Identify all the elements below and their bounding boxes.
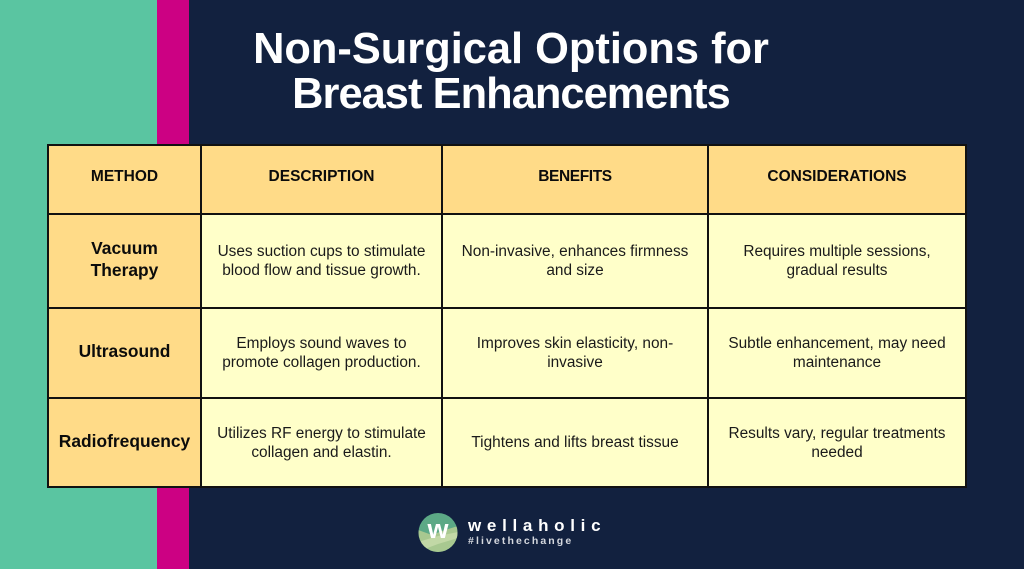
title: Non-Surgical Options for	[253, 25, 769, 73]
vacuum therapy benefits: Non-invasive, enhances firmness	[462, 243, 688, 260]
title	[253, 25, 769, 118]
ultrasound description: Employs sound waves to	[236, 335, 407, 352]
row label: vacuum therapy	[49, 215, 200, 307]
ultrasound considerations: Subtle enhancement, may need	[728, 335, 946, 352]
vacuum therapy considerations: gradual results	[787, 262, 887, 279]
radiofrequency benefits	[443, 399, 707, 486]
ultrasound description	[202, 309, 441, 397]
vacuum therapy benefits	[443, 215, 707, 307]
header: benefits	[443, 146, 707, 213]
header: description: DESCRIPTION	[269, 168, 374, 184]
row label: ultrasound	[49, 309, 200, 397]
vacuum therapy description: Uses suction cups to stimulate	[218, 243, 425, 260]
ultrasound benefits	[443, 309, 707, 397]
brand name: wellaholic	[468, 516, 606, 535]
radiofrequency benefits: Tightens and lifts breast tissue	[471, 434, 679, 451]
ultrasound considerations	[709, 309, 965, 397]
logo: wellaholic	[418, 513, 606, 552]
header: considerations	[709, 146, 965, 213]
vacuum therapy benefits: and size	[546, 262, 604, 279]
radiofrequency description	[202, 399, 441, 486]
radiofrequency considerations: needed	[811, 444, 863, 460]
header: benefits: BENEFITS	[538, 168, 612, 184]
icon: logo circle	[418, 513, 458, 552]
icon: logo circle: w	[426, 514, 449, 544]
row label: vacuum therapy: Therapy	[91, 260, 158, 280]
radiofrequency description: Utilizes RF energy to stimulate	[217, 424, 426, 442]
header: considerations: CONSIDERATIONS	[767, 168, 907, 184]
vacuum therapy considerations	[709, 215, 965, 307]
vacuum therapy description	[202, 215, 441, 307]
header: description	[202, 146, 441, 213]
radiofrequency description: collagen and elastin.	[251, 444, 392, 460]
row label: ultrasound: Ultrasound	[79, 341, 170, 361]
vacuum therapy considerations: Requires multiple sessions,	[743, 243, 931, 260]
background: magenta stripe	[157, 0, 189, 569]
row label: radiofrequency: Radiofrequency	[59, 430, 190, 450]
background: teal stripe	[0, 0, 157, 569]
tagline: #livethechange	[468, 535, 573, 547]
vacuum therapy description: blood flow and tissue growth.	[222, 262, 421, 279]
ultrasound benefits: Improves skin elasticity, non-	[477, 335, 673, 352]
row label: radiofrequency	[49, 399, 200, 486]
header: method	[49, 146, 200, 213]
ultrasound considerations: maintenance	[793, 354, 881, 371]
row label: vacuum therapy: Vacuum	[91, 238, 158, 258]
radiofrequency considerations: Results vary, regular treatments	[728, 424, 945, 442]
ultrasound description: promote collagen production.	[222, 354, 421, 371]
ultrasound benefits: invasive	[547, 354, 603, 371]
header: method: METHOD	[91, 168, 158, 184]
title: Breast Enhancements	[292, 70, 730, 118]
radiofrequency considerations	[709, 399, 965, 486]
table	[47, 144, 967, 488]
